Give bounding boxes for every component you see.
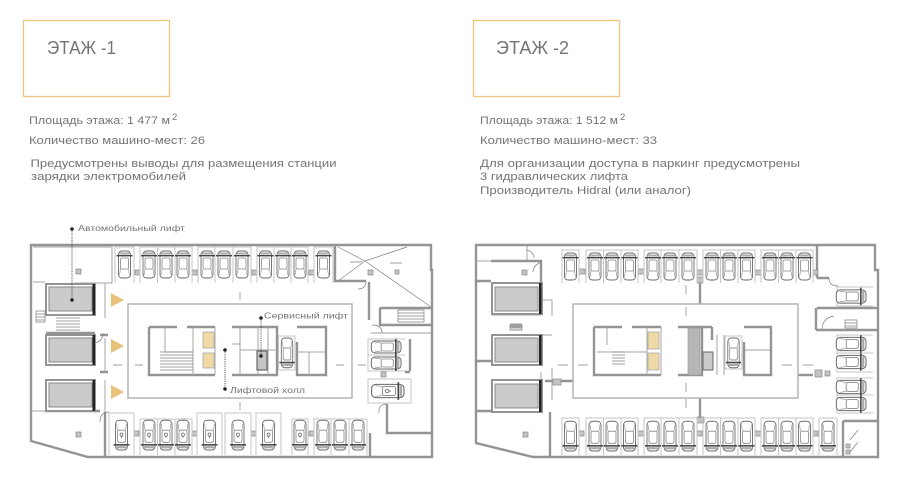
outer walls [31,245,432,457]
floor plan: floor -1 [31,223,432,457]
callout: elevator hall: Лифтовой холл [230,385,305,395]
stair and right-hand service room [371,308,431,333]
top parking bays [562,250,813,283]
outer walls [476,245,878,457]
callout: car lift [70,223,185,302]
bottom parking bays [109,413,367,455]
callout: elevator hall [223,348,305,395]
heading: floor -2: ЭТАЖ -2 [496,38,569,58]
heading box: floor -2 [474,20,620,96]
callout: car lift: Автомобильный лифт [78,223,185,233]
text: floor area: Площадь этажа: 1 512 м [480,115,618,127]
callout: service lift [259,310,348,358]
callout: service lift: Сервисный лифт [264,310,348,320]
elevator core [594,327,771,375]
text: description: Предусмотрены выводы для размещения станции [30,158,336,170]
text: superscript: 2 [620,112,625,123]
service rooms and partition walls [476,246,877,456]
text: description: 3 гидравлических лифта [480,171,629,183]
panel: floor -1 header [24,20,336,183]
gold entry arrow 1 [111,293,124,307]
text: description: Производитель Hidral (или аналог) [480,185,691,197]
service rooms and partition walls [32,245,432,456]
central ring road island [573,304,798,398]
car lifts [492,283,542,412]
text: floor area: Площадь этажа: 1 477 м [29,115,170,127]
car lifts [36,283,105,412]
gold entry arrow 3 [111,385,124,399]
right parking bays [368,339,411,403]
heading box: floor -1 [24,20,170,96]
floor plan: floor -2 [476,245,878,457]
traffic arrows [558,285,813,408]
text: parking spaces: Количество машино-мест: 26 [29,135,205,147]
right parking bays [836,287,873,413]
traffic arrows [113,262,402,410]
text: description [30,158,336,183]
text: parking spaces: Количество машино-мест: 33 [480,135,657,147]
central ring road island [128,304,352,398]
elevator core [149,327,326,375]
text: description: зарядки электромобилей [31,171,186,183]
text: description [480,158,800,197]
panel: floor -2 header [474,20,800,197]
top parking bays [115,247,333,283]
gold entry arrow 2 [111,339,124,353]
heading: floor -1: ЭТАЖ -1 [47,38,116,58]
text: description: Для организации доступа в паркинг предусмотрены [480,158,800,170]
text: superscript: 2 [172,112,177,123]
bottom parking bays [562,418,837,455]
